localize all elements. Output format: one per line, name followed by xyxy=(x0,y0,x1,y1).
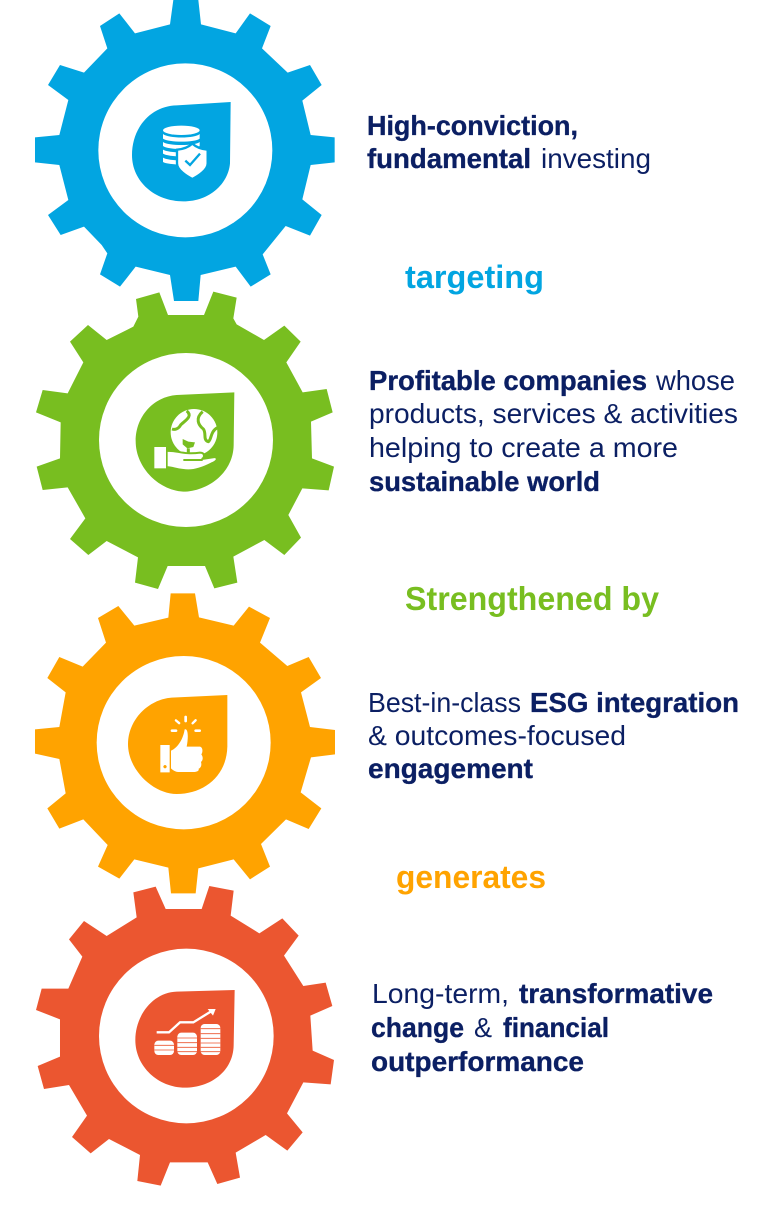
icon: coins and shield xyxy=(163,126,208,179)
text block: high-conviction investing: investing xyxy=(541,143,651,174)
panel: blue gear xyxy=(35,0,335,301)
text block: transformative change: change xyxy=(371,1012,464,1043)
text block: transformative change: & xyxy=(474,1012,492,1043)
text block: high-conviction investing: fundamental xyxy=(367,143,531,174)
text block: profitable companies xyxy=(369,365,738,497)
text block: profitable companies: products, services & activities xyxy=(369,398,738,429)
heading: generates: generates xyxy=(396,859,546,895)
heading: targeting: targeting xyxy=(405,259,544,295)
text block: profitable companies: Profitable companies xyxy=(369,365,647,396)
text block: profitable companies: helping to create a more xyxy=(369,432,678,463)
text block: high-conviction investing: High-conviction, xyxy=(367,110,578,141)
text block: high-conviction investing xyxy=(367,110,651,174)
icon: coin stacks and rising arrow xyxy=(154,1009,220,1055)
text block: ESG integration: ESG integration xyxy=(530,687,739,718)
text block: transformative change xyxy=(371,978,713,1077)
text block: transformative change: outperformance xyxy=(371,1046,584,1077)
panel: orange gear xyxy=(35,593,335,893)
text block: profitable companies: sustainable world xyxy=(369,466,600,497)
icon: globe in hand xyxy=(154,409,217,470)
text block: ESG integration: Best-in-class xyxy=(368,687,521,718)
icon: thumbs up xyxy=(160,716,203,772)
text block: transformative change: financial xyxy=(503,1012,609,1043)
heading: strengthened by: Strengthened by xyxy=(405,580,660,617)
text block: ESG integration: engagement xyxy=(368,753,533,784)
text block: profitable companies: whose xyxy=(655,365,735,396)
text block: transformative change: Long-term, xyxy=(372,978,509,1009)
panel: green gear xyxy=(36,292,334,589)
text block: ESG integration: & outcomes-focused xyxy=(368,720,626,751)
text block: transformative change: transformative xyxy=(519,978,713,1009)
panel: red gear xyxy=(36,886,334,1186)
text block: ESG integration xyxy=(368,687,739,784)
